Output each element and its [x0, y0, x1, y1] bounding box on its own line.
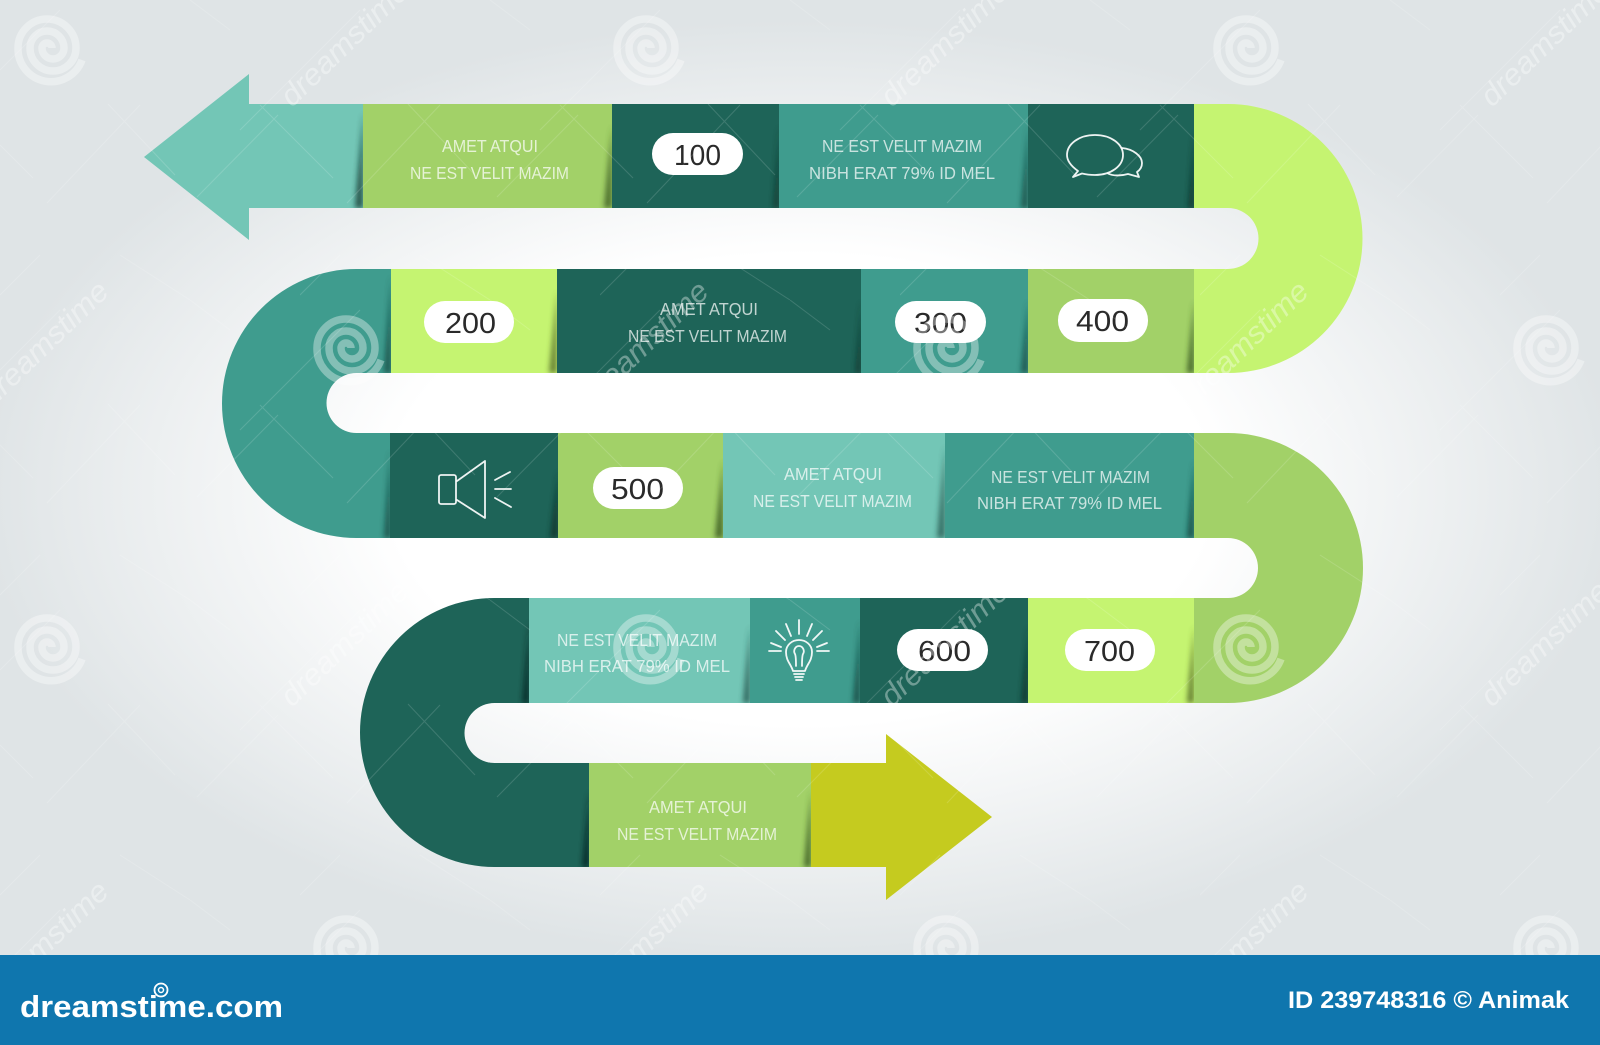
panel: row 5 — [582, 734, 992, 900]
segment: teal block with bulb icon — [750, 598, 860, 703]
pill: 300: 300 — [914, 308, 967, 340]
segment: mint text block — [529, 598, 750, 703]
segment: mint text block: NIBH ERAT 79% ID MEL — [544, 656, 730, 676]
watermark layer: dreamstime — [274, 575, 416, 713]
pill: 600: 600 — [918, 636, 971, 668]
icon: chat bubbles — [1067, 135, 1142, 177]
arrow: right pointing end arrow — [811, 734, 992, 900]
segment: mint text block — [723, 433, 945, 538]
pill: 700 — [1065, 629, 1155, 671]
footer logo: dreamstime.com: dreamstime.com — [20, 989, 283, 1024]
pill: 600 — [897, 629, 988, 671]
pill: 700: 700 — [1084, 636, 1135, 668]
footer credit: ID 239748316 © Animak — [1288, 987, 1570, 1014]
arrow: left pointing start arrow — [144, 74, 363, 240]
segment: green text block — [589, 763, 811, 867]
segment: green block — [1028, 269, 1194, 373]
segment: teal block — [861, 269, 1028, 373]
segment: green text block: AMET ATQUI — [649, 797, 747, 817]
watermark layer: dreamstime — [874, 575, 1016, 713]
segment: teal text block — [779, 104, 1028, 208]
segment: dark text block: NE EST VELIT MAZIM — [628, 326, 787, 346]
pill: 300 — [895, 301, 986, 343]
footer bar — [0, 955, 1600, 1045]
icon: speaker — [439, 461, 511, 518]
curved connector: rows 4 to 5 — [360, 598, 589, 867]
pill: 200 — [424, 301, 514, 343]
segment: teal text block: NE EST VELIT MAZIM — [991, 467, 1150, 487]
curved connector: rows 1 to 2 — [1194, 104, 1362, 373]
panel: row 4 — [522, 598, 1194, 703]
segment: dark block with 100 — [612, 104, 779, 208]
segment: teal text block: NIBH ERAT 79% ID MEL — [977, 493, 1162, 513]
segment: teal text block: NE EST VELIT MAZIM — [822, 136, 982, 156]
watermark layer: dreamstime — [1174, 875, 1316, 1013]
segment: dark text block — [557, 269, 861, 373]
curved connector: rows 2 to 3 — [222, 269, 391, 538]
segment: green block — [558, 433, 723, 538]
watermark layer: dreamstime — [574, 275, 716, 413]
panel: row 3 — [384, 433, 1194, 538]
pill: 100: 100 — [674, 140, 721, 172]
segment: lime block — [391, 269, 557, 373]
segment: dark block — [860, 598, 1028, 703]
segment: green text block: AMET ATQUI — [442, 136, 538, 156]
pill: 400 — [1058, 299, 1148, 342]
pill: 500 — [593, 467, 683, 509]
segment: green text block: NE EST VELIT MAZIM — [410, 163, 569, 183]
segment: mint text block: NE EST VELIT MAZIM — [753, 491, 912, 511]
segment: teal text block: NIBH ERAT 79% ID MEL — [809, 163, 995, 183]
pill: 200: 200 — [445, 308, 496, 340]
segment: teal text block — [945, 433, 1194, 538]
pill: 500: 500 — [611, 474, 664, 506]
segment: dark block with chat icon — [1028, 104, 1194, 208]
segment: green text block: NE EST VELIT MAZIM — [617, 824, 777, 844]
segment: dark block with speaker icon — [390, 433, 558, 538]
icon: light bulb — [769, 620, 829, 680]
segment: lime block — [1028, 598, 1194, 703]
segment: mint text block: NE EST VELIT MAZIM — [557, 630, 717, 650]
panel: row 2 — [384, 269, 1194, 373]
watermark layer: dreamstime — [1174, 275, 1316, 413]
panel: row 1 — [144, 74, 1194, 240]
pill: 100 — [652, 133, 743, 175]
pill: 400: 400 — [1076, 306, 1129, 338]
curved connector: rows 3 to 4 — [1194, 433, 1363, 703]
watermark layer: dreamstime — [574, 875, 716, 1013]
segment: dark text block: AMET ATQUI — [660, 299, 758, 319]
segment: mint text block: AMET ATQUI — [784, 464, 882, 484]
segment: green text block — [363, 104, 612, 208]
